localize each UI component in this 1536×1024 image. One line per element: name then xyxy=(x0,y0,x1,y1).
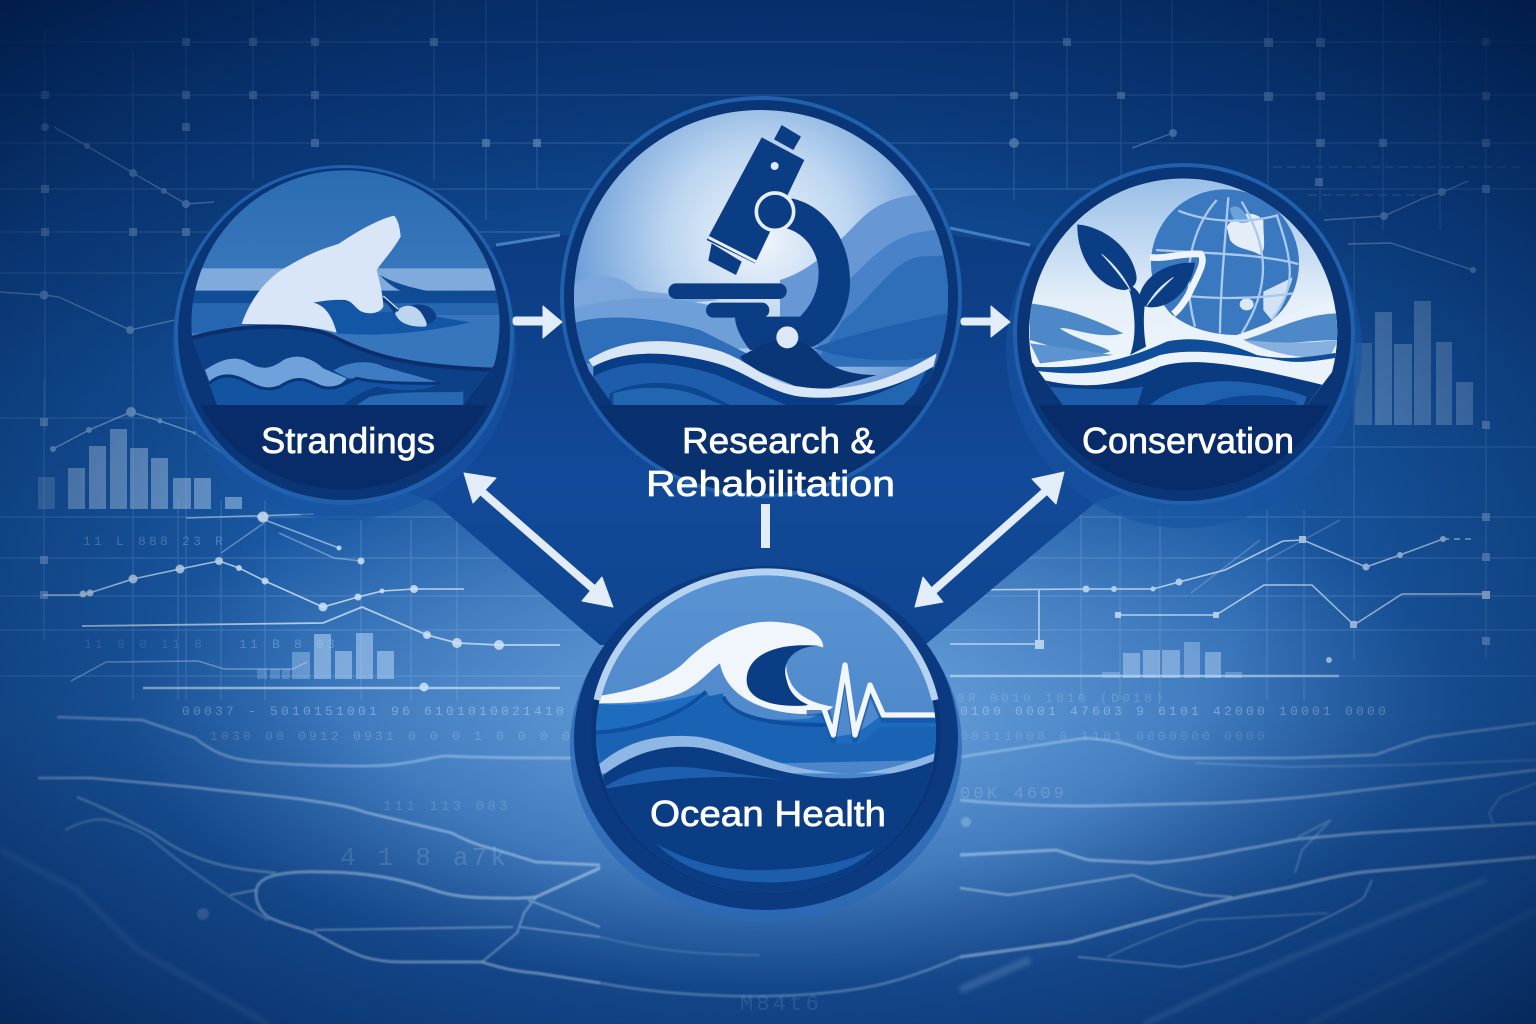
line chart: upper left xyxy=(0,123,214,334)
label: Conservation: Conservation xyxy=(1082,420,1294,461)
digit rows: 00K 4609 xyxy=(960,785,1067,804)
digit rows: 111 113 083 xyxy=(383,799,511,815)
line chart: above left bars xyxy=(50,407,221,452)
label: Rehabilitation: Rehabilitation xyxy=(646,463,895,504)
node: Conservation xyxy=(1006,163,1362,528)
whale fluke shape xyxy=(242,216,401,333)
node: Strandings xyxy=(170,163,516,520)
arrow: conservation and ocean health xyxy=(915,472,1064,607)
digit rows: 9981 xyxy=(968,489,1014,505)
illustration: sprout and globe xyxy=(1029,178,1338,405)
illustration: wave with pulse xyxy=(596,575,936,893)
arrow: strandings and ocean health xyxy=(464,473,613,607)
connector: research to ocean health xyxy=(761,504,770,548)
digit rows: 1030 00 0912 0931 0 0 0 1 0 0 0 0 0 1 1 0 0 xyxy=(210,729,683,744)
label: Strandings: Strandings xyxy=(261,420,435,461)
arrow: strandings to research xyxy=(513,306,562,338)
digit rows: 00037 - 5010151001 96 6101010021410 xyxy=(182,704,567,719)
node: Research & Rehabilitation xyxy=(560,96,980,504)
digit rows xyxy=(83,479,1389,1017)
background: grid nodes xyxy=(40,38,1490,645)
digit rows: 0R 0010 1810 (D018) xyxy=(957,691,1166,706)
digit rows: 11 L 888 23 R xyxy=(83,534,226,549)
label: Ocean Health: Ocean Health xyxy=(650,793,886,834)
digit rows: 11 0 0 11 8 xyxy=(84,637,205,652)
soft lower ocean strands xyxy=(0,850,1536,1024)
background: data grid xyxy=(0,0,1536,700)
node: Ocean Health xyxy=(570,560,970,927)
microscope body xyxy=(668,125,850,350)
digit rows: 4 1 8 a7k xyxy=(340,843,509,873)
arrow: research to conservation xyxy=(961,306,1010,337)
line chart: upper right xyxy=(1132,129,1476,273)
bar chart: lower center-left xyxy=(257,633,394,679)
illustration: beached whale in waves xyxy=(192,170,500,405)
line chart: mid right xyxy=(950,520,1490,676)
connector panel xyxy=(340,228,1190,645)
globe xyxy=(1151,189,1299,337)
bar chart: lower center-right xyxy=(1102,642,1242,678)
label: Research &: Research & xyxy=(682,420,875,461)
digit rows: 00311000 0 1101 0000000 0000 xyxy=(960,729,1268,744)
digit rows: M84t6 xyxy=(740,992,822,1017)
ring: light rim xyxy=(597,572,935,700)
bar chart: left xyxy=(38,429,242,509)
digit rows: 11 B 8 03 xyxy=(239,637,338,652)
ocean network lines xyxy=(38,717,1536,996)
illustration: microscope over waves xyxy=(574,110,948,405)
line chart: mid left xyxy=(43,512,560,692)
bar chart: right xyxy=(1355,301,1473,425)
sprout leaves xyxy=(1077,224,1195,355)
digit rows: 0100 0001 47603 9 6101 42000 10001 0000 xyxy=(960,704,1389,719)
digit rows: 8891 xyxy=(530,479,576,495)
waves xyxy=(1030,303,1123,354)
